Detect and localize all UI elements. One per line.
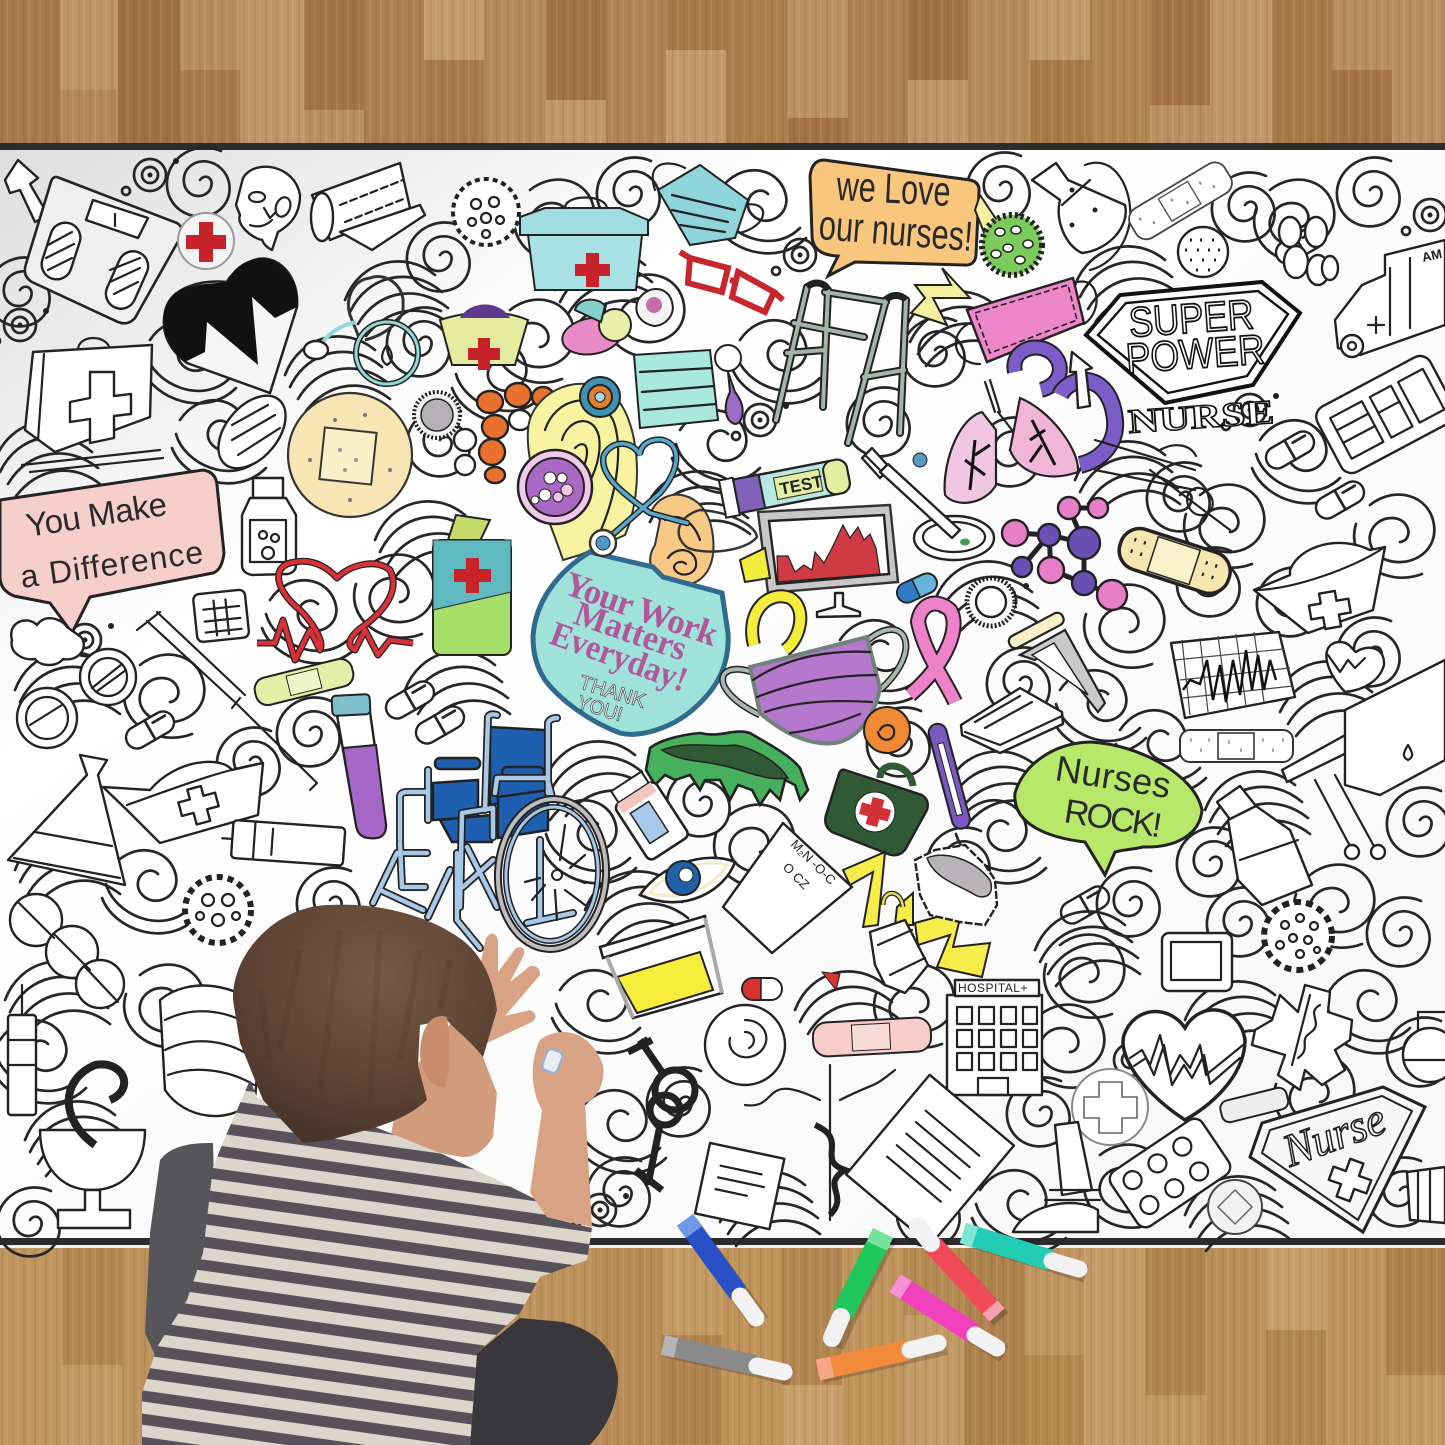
icon: stethoscope teal: [304, 277, 418, 384]
icon: heart ecg: [1123, 1010, 1245, 1120]
icon: purple otoscope: [715, 345, 743, 424]
icon: orange blood cells: [454, 383, 554, 483]
icon: orange swirl: [864, 707, 910, 753]
icon: arrow gender male: [5, 160, 48, 222]
icon: green med bag: [825, 766, 928, 855]
icon: chemical paper: M₂N -O-C: [788, 837, 839, 887]
icon: purple mask: [723, 630, 906, 743]
icon: target disc: [580, 377, 620, 417]
icon: white cross circle: [1072, 1069, 1148, 1145]
icon: green band-aid: [252, 656, 356, 708]
icon: purple swirl with arrow: [1014, 348, 1115, 465]
badge: your work matters everyday: THANK: [577, 672, 649, 713]
icon: purple petri cell: [518, 450, 592, 524]
icon: prescription note: [695, 1143, 784, 1229]
icon: blue capsule: [894, 570, 940, 606]
doodle background swirls: [0, 147, 1445, 1256]
wood floor top: [0, 0, 1445, 145]
icon: syringe horizontal: [221, 819, 345, 866]
icon: forceps and striped leaf: [22, 383, 299, 481]
sock and leg: [145, 1143, 216, 1355]
icon: green virus: [982, 215, 1042, 275]
badge: super power nurse: SUPER: [1127, 290, 1255, 346]
callout: you make a difference: You Make: [23, 485, 169, 544]
marker: orange: [818, 1343, 946, 1374]
icon: yellow swirl large: [528, 384, 637, 560]
icon: caduceus: [745, 1065, 895, 1220]
badge: super power nurse: POWER: [1124, 325, 1266, 382]
icon: disc band-aid: [1208, 1180, 1262, 1234]
icon: pink mask: [956, 278, 1097, 364]
icon: blood bag: [870, 893, 928, 993]
icon: small heart sketch: [1326, 642, 1384, 692]
icon: green slime: [646, 732, 808, 805]
icon: test tube purple: [332, 694, 386, 838]
markers on floor: [663, 1220, 1086, 1377]
callout: we love our nurses: our nurses!: [817, 201, 975, 260]
icon: green iv bag: [433, 515, 511, 655]
icon: test tube label test: [719, 456, 852, 518]
icon: virus gear: [185, 877, 251, 943]
icon: gender symbols: [628, 1040, 695, 1190]
writing arm: [530, 1032, 604, 1227]
icon: blue stethoscope: [590, 440, 757, 556]
callout: we love our nurses: [810, 160, 979, 276]
icon: striped cup right: [1407, 1167, 1445, 1223]
icon: first aid case teal: [520, 198, 648, 290]
icon: chemical paper: [723, 823, 852, 953]
icon: thermometer purple: [927, 722, 972, 831]
icon: bathroom scale: [25, 177, 182, 323]
icon: pink ribbon: [910, 604, 955, 702]
badge: super power nurse: [1086, 282, 1300, 441]
marker: blue: [685, 1220, 760, 1323]
icon: yellow swirls: [740, 548, 800, 650]
badge: your work matters everyday: Your Work: [559, 564, 724, 654]
marker: grey: [663, 1345, 791, 1377]
icon: wheelchair blue: [373, 714, 610, 952]
badge: your work matters everyday: Matters: [569, 594, 692, 668]
icon: flask left: [8, 755, 125, 885]
icon: eye: [640, 858, 735, 902]
hair strands: [260, 930, 450, 1100]
icon: small white bandage: [1219, 1086, 1290, 1124]
marker: teal: [963, 1233, 1086, 1274]
icon: stretcher: [1282, 660, 1445, 859]
icon: teal gauze mask: [634, 350, 718, 428]
icon: pink bandage: [812, 1017, 932, 1057]
callout: nurses rock: [1015, 742, 1202, 875]
icon: cream bandage: [1114, 523, 1235, 599]
icon: scissors: [1095, 440, 1230, 530]
icon: yellow lightning top: [911, 195, 1000, 325]
icon: pill bottle phone: [606, 768, 690, 862]
striped shirt: [142, 1080, 592, 1445]
icon: red cross disc: [178, 213, 234, 269]
icon: large round band-aid: [288, 393, 412, 517]
icon: test tube label test: TEST: [778, 472, 825, 499]
icon: chemical paper: O CZ: [780, 860, 812, 892]
icon: ambulance: [1335, 240, 1445, 357]
icon: striped tablets: [17, 649, 136, 748]
icon: walker: [776, 283, 906, 443]
hair: [233, 905, 497, 1143]
icon: hospital: HOSPITAL+: [958, 981, 1028, 995]
boy: [142, 905, 618, 1445]
marker: green: [832, 1233, 887, 1346]
icon: mortar and swab: [862, 448, 994, 560]
icon: cloud: [11, 618, 84, 665]
badge: nurse shield: [1250, 1087, 1425, 1232]
ear: [420, 1016, 450, 1087]
icon: dotted ball: [1178, 227, 1228, 277]
icon: red heart pulse: [257, 561, 413, 660]
icon: virus: [453, 179, 519, 245]
badge: your work matters everyday: YOU!: [575, 692, 625, 726]
icon: clipboard: [846, 1075, 1014, 1245]
icon: medicine bottle: [242, 478, 296, 575]
icon: syringe diagonal: [137, 612, 317, 790]
pants knee: [470, 1318, 618, 1445]
icon: bowl of hygieia: [40, 1064, 145, 1228]
icon: bandage right: [1180, 730, 1293, 762]
icon: nurse cap: [440, 304, 528, 370]
callout: we love our nurses: we Love: [835, 162, 952, 215]
icon: tablets stack: [10, 894, 124, 1008]
icon: white bottle: [1217, 786, 1312, 905]
icon: cell cluster: [1279, 217, 1338, 285]
callout: nurses rock: ROCK!: [1062, 792, 1164, 845]
icon: bandage roll: [311, 163, 425, 250]
badge: your work matters everyday: Everyday!: [545, 614, 693, 699]
badge: your work matters everyday: [533, 552, 728, 734]
icon: tablet grid: [193, 589, 249, 642]
icon: nurse hat left: [103, 762, 263, 843]
callout: you make a difference: [0, 470, 224, 633]
icon: first aid box left: [25, 338, 152, 452]
callout: you make a difference: a Difference: [18, 534, 205, 595]
icon: gear grey: [414, 392, 460, 438]
icon: orange spiral: [650, 495, 713, 585]
icon: molecule: [1002, 497, 1127, 610]
icon: round flask right: [1403, 1012, 1445, 1082]
icon: medical star: [1252, 985, 1352, 1090]
icon: tablet device: [1162, 933, 1232, 991]
icon: blue face mask top: [653, 163, 763, 245]
icon: lungs: [945, 380, 1078, 503]
marker in hand: [541, 1048, 564, 1074]
icon: nurse hat right: [1254, 543, 1385, 633]
icon: ecg sheet: [1171, 632, 1295, 718]
marker: pink: [895, 1283, 1004, 1354]
icon: blister pack: [1106, 1115, 1234, 1231]
icon: microscope: [1013, 1122, 1100, 1232]
icon: rose swirl: [705, 1005, 785, 1085]
icon: urine cup: [600, 916, 722, 1018]
poster sheet: [0, 143, 1445, 1248]
icon: red glasses: [680, 252, 783, 312]
icon: yellow lightning: [843, 852, 990, 977]
icon: black and white heart with pulse: [163, 258, 298, 393]
icon: syringe vertical: [8, 985, 36, 1115]
wood floor bottom: [0, 1245, 1445, 1445]
neck and face: [390, 1000, 497, 1157]
raised hand: [470, 933, 540, 1043]
icon: hospital: [947, 980, 1042, 1095]
callout: nurses rock: Nurses: [1053, 747, 1174, 806]
icon: pink cell: [636, 289, 673, 326]
icon: crutch: [1007, 611, 1105, 712]
icon: bandage top right: [1125, 158, 1236, 244]
icon: pills colored: [559, 300, 631, 359]
icon: monitor chart: [758, 505, 898, 617]
icon: grey splat: [915, 845, 997, 925]
icon: capsule red: [742, 972, 840, 1000]
icon: dotted virus right: [1264, 902, 1332, 970]
icon: equipment case: [1312, 352, 1445, 477]
icon: surgical mask left: [160, 986, 262, 1116]
icon: ambulance: AM: [1421, 246, 1443, 265]
icon: lab flask top right: [1032, 163, 1130, 270]
marker: red: [918, 1226, 1001, 1319]
badge: nurse shield: Nurse: [1275, 1093, 1392, 1177]
icon: ring coil: [967, 578, 1015, 626]
icon: book: [961, 688, 1063, 753]
icon: skull: [236, 167, 300, 250]
badge: super power nurse: NURSE: [1127, 394, 1275, 441]
